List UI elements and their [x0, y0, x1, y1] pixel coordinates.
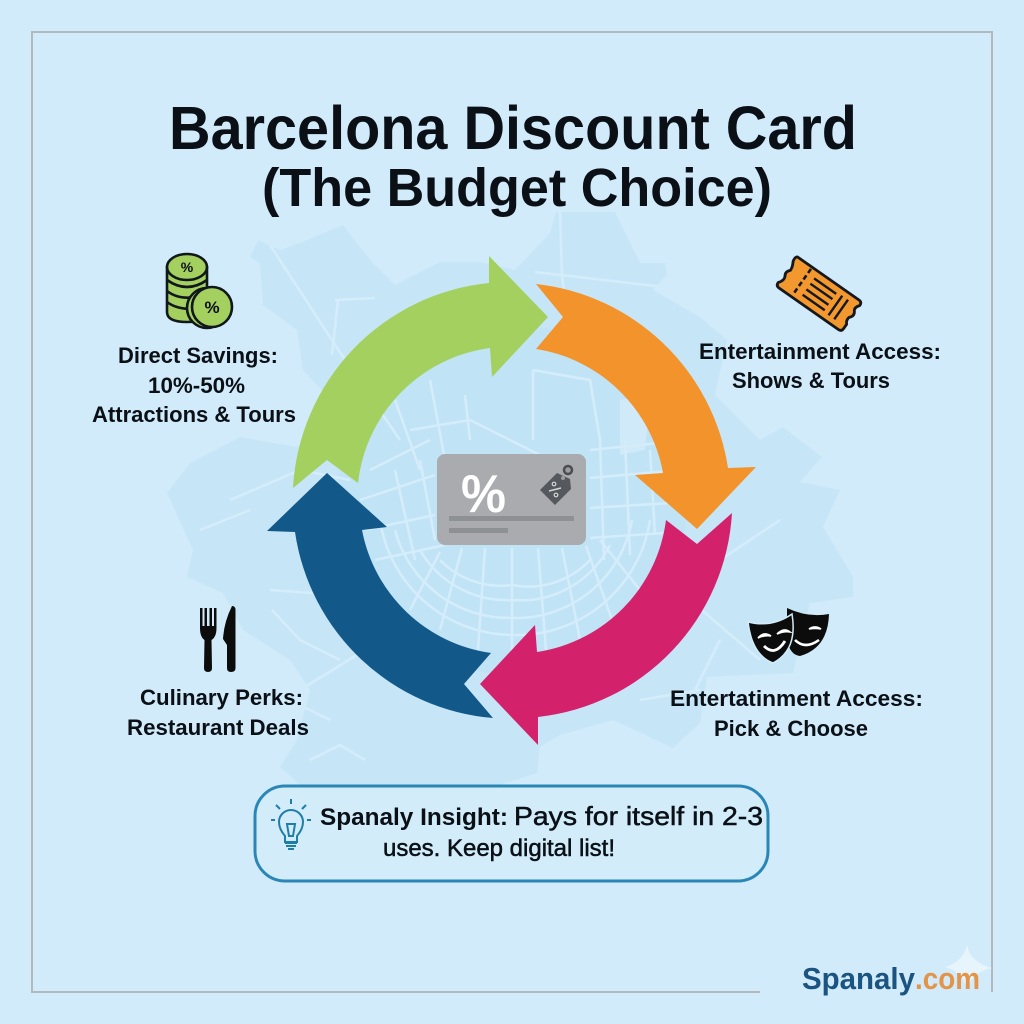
title: Barcelona Discount Card — [169, 94, 857, 162]
panel: entertainment shows: Shows & Tours — [732, 368, 890, 393]
panel: entertainment pick — [670, 608, 923, 741]
icon: light bulb — [271, 799, 311, 849]
panel: entertainment pick: Pick & Choose — [714, 716, 868, 741]
callout: Pays for itself in 2-3 — [514, 801, 763, 831]
callout: uses. Keep digital list! — [383, 835, 615, 862]
icon: fork and knife — [200, 606, 236, 672]
callout: Spanaly Insight: — [320, 804, 508, 831]
panel: direct savings: Attractions & Tours — [92, 402, 296, 427]
orange arrow — [536, 284, 756, 529]
icon: theater masks — [748, 608, 829, 663]
callout — [255, 786, 768, 881]
panel: culinary perks — [127, 606, 309, 740]
center discount card: % — [461, 465, 506, 524]
icon: price tag — [540, 466, 572, 505]
panel: culinary perks: Restaurant Deals — [127, 715, 309, 740]
panel: direct savings: 10%-50% — [148, 373, 245, 398]
icon: coins: % — [204, 298, 220, 317]
panel: direct savings — [92, 254, 296, 427]
icon: coins: % — [181, 259, 194, 275]
icon: coins — [167, 254, 232, 328]
title: (The Budget Choice) — [262, 158, 772, 218]
logo: Spanaly — [802, 961, 916, 996]
panel: entertainment shows: Entertainment Access: — [699, 339, 941, 364]
panel: entertainment shows — [699, 256, 941, 393]
panel: entertainment pick: Entertatinment Access: — [670, 686, 923, 711]
icon: ticket — [776, 256, 862, 332]
blue arrow — [267, 473, 493, 718]
panel: direct savings: Direct Savings: — [118, 343, 278, 368]
green arrow — [293, 256, 548, 488]
logo — [802, 945, 992, 996]
title — [169, 94, 857, 218]
center discount card — [437, 454, 586, 545]
cycle diagram — [267, 256, 756, 745]
pink arrow — [480, 513, 732, 745]
panel: culinary perks: Culinary Perks: — [140, 685, 303, 710]
logo: .com — [915, 961, 980, 996]
background city map — [167, 212, 853, 785]
